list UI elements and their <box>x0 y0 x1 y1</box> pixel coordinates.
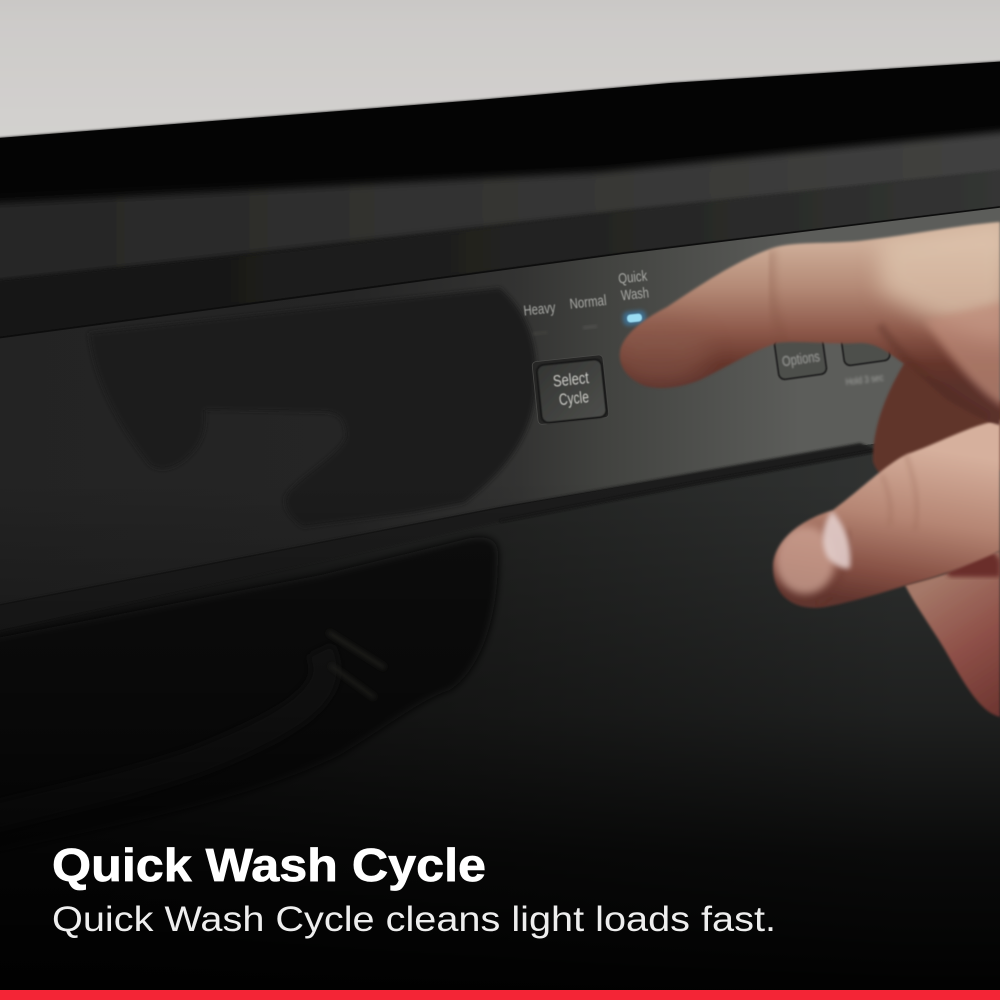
finger fold shadow <box>945 548 1000 577</box>
label: Normal: Normal <box>569 292 607 313</box>
heading: Quick Wash Cycle <box>52 839 486 891</box>
reflection on the panel <box>89 288 536 527</box>
handle curve highlight <box>0 650 325 820</box>
thumb knuckle creases <box>882 455 918 508</box>
label: Quick Wash <box>617 268 650 304</box>
button: partly hidden <box>841 330 891 366</box>
handle glints <box>328 632 385 698</box>
hand pressing the button <box>610 215 1000 717</box>
panel top edge line <box>0 202 1000 343</box>
fold under the hand <box>878 324 911 362</box>
panel lower ledge <box>0 443 880 640</box>
ledge dark seam <box>500 451 875 521</box>
label: Quick Wash: Quick <box>617 268 648 288</box>
darker recessed band <box>0 166 1000 343</box>
control panel face <box>0 202 1000 612</box>
button: Options <box>774 333 827 380</box>
index finger <box>610 215 1000 430</box>
lower finger, blurred <box>905 551 1000 717</box>
label: Heavy: Heavy <box>523 299 557 320</box>
black trim band <box>0 59 1000 195</box>
right hand tone <box>925 300 1000 410</box>
grey top edge of the door <box>0 128 1000 287</box>
fingertip tone <box>620 342 708 386</box>
palm shadow between fingers <box>873 362 1000 477</box>
label: Quick Wash: Wash <box>620 285 650 304</box>
indicator: Normal <box>583 324 597 330</box>
lower door surface <box>0 420 1000 1000</box>
indicator: Heavy <box>533 330 548 336</box>
button: Select Cycle: Cycle <box>558 387 590 409</box>
label: hold 3 sec: Hold 3 sec <box>845 373 884 388</box>
indicator: Quick Wash blue LED <box>622 310 647 326</box>
red footer bar <box>0 990 1000 1000</box>
button: Select Cycle <box>532 355 609 425</box>
button: Options: Options <box>781 348 821 370</box>
subheading: Quick Wash Cycle cleans light loads fast. <box>52 900 776 939</box>
thumb tip glow <box>775 526 835 594</box>
thumb <box>771 420 1000 609</box>
control panel labels and buttons <box>523 268 891 425</box>
handle reflection, dark recess <box>0 537 498 860</box>
thumb nail <box>823 511 850 569</box>
countertop edge, light grey <box>0 0 1000 141</box>
back of hand highlight <box>880 215 1000 340</box>
button: Select Cycle: Select <box>552 368 590 391</box>
knuckle fold <box>768 250 777 312</box>
bottom fade to black <box>0 480 1000 1000</box>
thumb cuticle crease <box>848 532 850 536</box>
